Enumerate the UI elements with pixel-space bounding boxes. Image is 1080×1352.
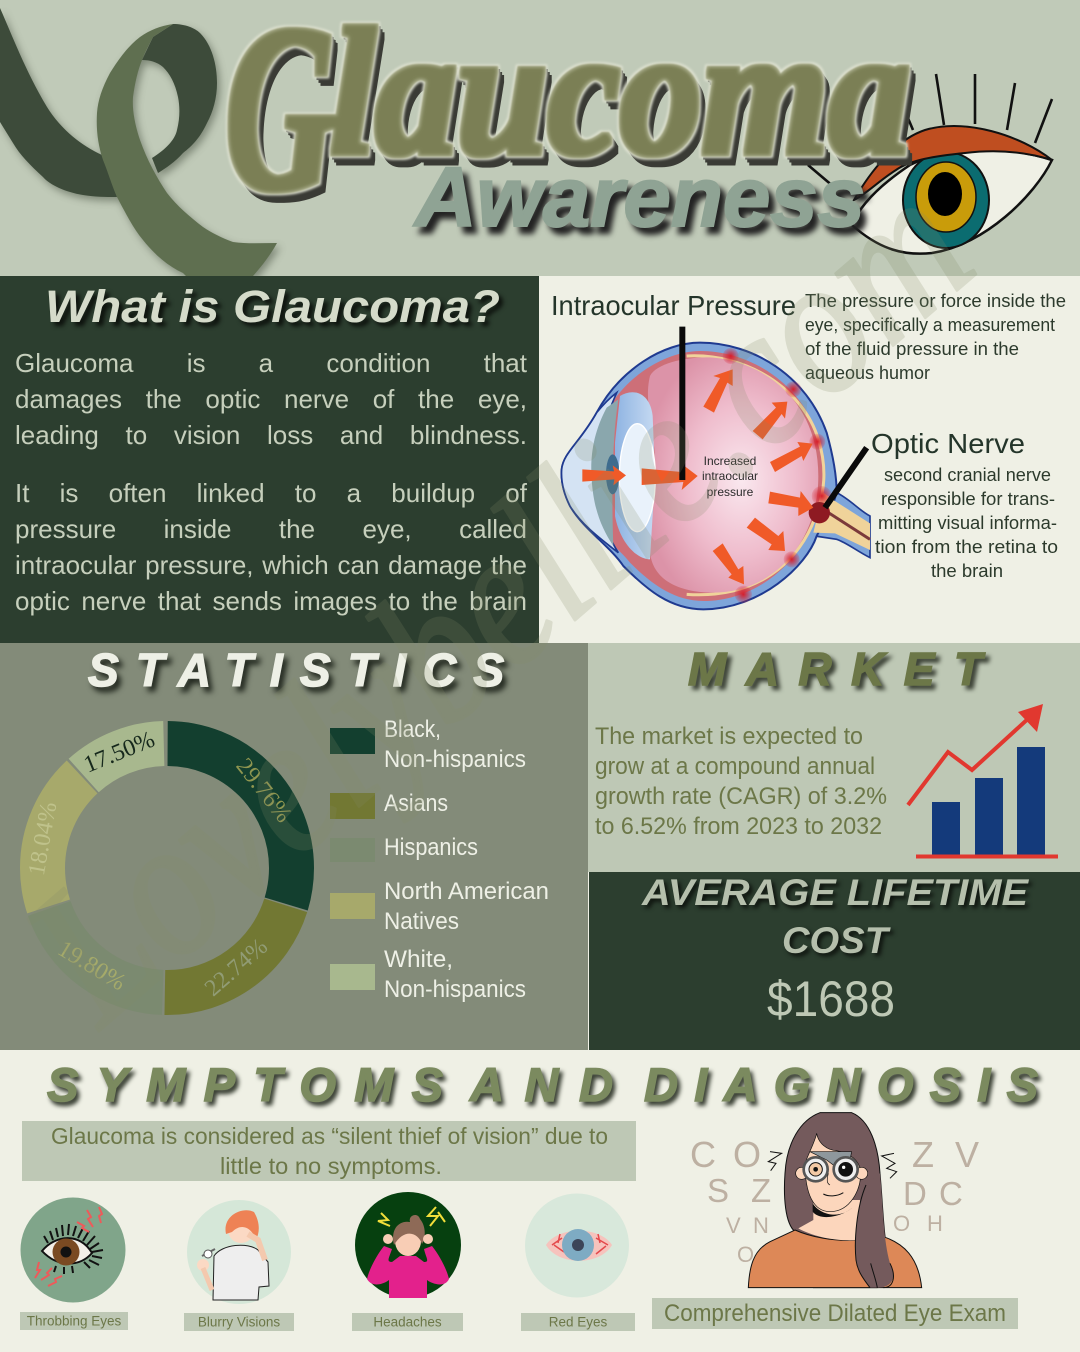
text: intraocular pressure description: aqueous humor (805, 363, 930, 383)
illustration: eye chart letters: V (955, 1134, 979, 1175)
heading: STATISTICS: STATISTICS (88, 644, 504, 696)
legend: statistics categories: North American (384, 878, 549, 905)
text: glaucoma definition (15, 348, 527, 450)
label: increased intraocular pressure: Increased (704, 454, 756, 468)
icon: rising bar chart with arrow (908, 704, 1058, 856)
panel: market (588, 643, 1080, 872)
heading: AVERAGE LIFETIME COST (641, 872, 1029, 961)
illustration: eye chart letters: O (737, 1242, 754, 1267)
legend: statistics categories: Asians (384, 790, 448, 817)
diagram: eyeball cross-section (562, 327, 870, 609)
heading: Intraocular Pressure: Intraocular Pressure (551, 290, 796, 321)
label: Red Eyes (521, 1313, 635, 1331)
label: increased intraocular pressure: pressure (707, 485, 754, 499)
label: increased intraocular pressure (702, 454, 758, 499)
illustration: eye chart letters: O (733, 1134, 761, 1175)
text: market growth: The market is expected to (595, 723, 863, 750)
text: optic nerve description: tion from the retina to (875, 537, 1058, 557)
donut chart: glaucoma statistics: 22.74% (200, 934, 273, 1002)
illustration: eye chart letters: Z (912, 1134, 934, 1175)
panel: intraocular pressure diagram (539, 276, 1080, 643)
illustration: eye chart letters (690, 1134, 979, 1267)
text: market growth: growth rate (CAGR) of 3.2% (595, 783, 887, 810)
illustration: eye chart letters: H (927, 1211, 943, 1236)
callout: silent thief of vision: little to no symptoms. (220, 1153, 442, 1179)
label: Comprehensive Dilated Eye Exam: Comprehensive Dilated Eye Exam (664, 1300, 1006, 1327)
text: market growth (595, 723, 887, 840)
panel: what is glaucoma (0, 276, 539, 643)
text: optic nerve description: responsible for trans- (881, 489, 1055, 509)
legend: statistics categories: Black, (384, 716, 441, 743)
label: Blurry Visions (184, 1313, 294, 1331)
label: Headaches: Headaches (373, 1314, 442, 1330)
text: market growth: to 6.52% from 2023 to 2032 (595, 813, 882, 840)
illustration: eye chart letters: Z (751, 1172, 771, 1209)
icon: awareness ribbon (0, 8, 277, 276)
legend: statistics categories: White, (384, 946, 453, 973)
text: optic nerve description (875, 465, 1058, 581)
illustration: eye chart letters: V (726, 1213, 741, 1238)
text: glaucoma definition: Glaucoma is a condition that (15, 348, 527, 378)
text: glaucoma definition: damages the optic nerve of the eye, (15, 384, 527, 414)
illustration: eye chart letters: S (707, 1172, 729, 1209)
label: Throbbing Eyes: Throbbing Eyes (27, 1314, 122, 1328)
label: Red Eyes: Red Eyes (549, 1314, 608, 1330)
icon: stylised eye (808, 74, 1052, 254)
icon: headaches (355, 1192, 461, 1298)
panel: statistics (0, 643, 588, 1050)
legend: statistics categories: Non-hispanics (384, 976, 526, 1003)
text: intraocular pressure explanation: optic nerve that sends images to the brain (15, 586, 527, 616)
text: glaucoma definition: leading to vision loss and blindness. (15, 420, 527, 450)
text: intraocular pressure description (805, 291, 1066, 383)
illustration: eye chart letters: O (893, 1211, 910, 1236)
label: increased intraocular pressure: intraocular (702, 469, 758, 483)
heading: SYMPTOMS AND DIAGNOSIS: AND (469, 1058, 613, 1111)
legend: statistics categories: Non-hispanics (384, 746, 526, 773)
text: intraocular pressure explanation: pressure inside the eye, called (15, 514, 527, 544)
heading: What is Glaucoma?: What is Glaucoma? (45, 281, 500, 332)
heading: AVERAGE LIFETIME COST: AVERAGE LIFETIME (641, 872, 1029, 913)
donut chart: glaucoma statistics: 18.04% (24, 800, 62, 877)
callout: silent thief of vision: Glaucoma is considered as “silent thief of vision” due to (51, 1123, 608, 1149)
text: optic nerve description: the brain (931, 561, 1003, 581)
heading: SYMPTOMS AND DIAGNOSIS (47, 1058, 1038, 1111)
text: optic nerve description: mitting visual informa- (878, 513, 1057, 533)
text: intraocular pressure explanation: intraocular pressure, which can damage the (15, 550, 527, 580)
subtitle: Awareness: Awareness (413, 150, 865, 244)
panel: average lifetime cost (589, 872, 1080, 1050)
illustration: eye chart letters: C (690, 1134, 716, 1175)
illustration: eye chart letters: N (753, 1213, 769, 1238)
text: market growth: grow at a compound annual (595, 753, 875, 780)
illustration: eye chart letters: C (939, 1175, 963, 1212)
label: Blurry Visions: Blurry Visions (198, 1314, 280, 1330)
text: optic nerve description: second cranial nerve (884, 465, 1051, 485)
panel: header background (0, 0, 1080, 276)
panel: symptoms and diagnosis (0, 1050, 1080, 1352)
illustration: woman with trial frame glasses (748, 1113, 922, 1288)
text: intraocular pressure description: of the fluid pressure in the (805, 339, 1019, 359)
legend: statistics categories (330, 716, 549, 1003)
text: intraocular pressure explanation (15, 478, 527, 616)
text: intraocular pressure description: eye, specifically a measurement (805, 315, 1055, 335)
heading: Optic Nerve: Optic Nerve (871, 428, 1025, 459)
label: Headaches (352, 1313, 463, 1331)
legend: statistics categories: Natives (384, 908, 459, 935)
legend: statistics categories: Hispanics (384, 834, 478, 861)
text: intraocular pressure description: The pressure or force inside the (805, 291, 1066, 311)
icon: throbbing eyes (20, 1198, 126, 1302)
icon: blurry visions (187, 1200, 291, 1304)
illustration: eye chart letters: D (903, 1175, 927, 1212)
heading: MARKET: MARKET (688, 643, 986, 695)
callout: silent thief of vision (22, 1121, 636, 1181)
text: intraocular pressure explanation: It is often linked to a buildup of (15, 478, 527, 508)
heading: SYMPTOMS AND DIAGNOSIS: SYMPTOMS (47, 1058, 443, 1111)
donut chart: glaucoma statistics (24, 727, 297, 1002)
title: Glaucoma (226, 0, 910, 240)
heading: AVERAGE LIFETIME COST: COST (782, 920, 892, 961)
donut chart: glaucoma statistics: 29.76% (230, 754, 297, 828)
donut chart: glaucoma statistics: 19.80% (53, 936, 130, 996)
donut chart: glaucoma statistics: 17.50% (80, 727, 159, 778)
value: $1688: $1688 (767, 971, 895, 1027)
heading: SYMPTOMS AND DIAGNOSIS: DIAGNOSIS (644, 1058, 1038, 1111)
icon: red eyes (525, 1194, 629, 1298)
